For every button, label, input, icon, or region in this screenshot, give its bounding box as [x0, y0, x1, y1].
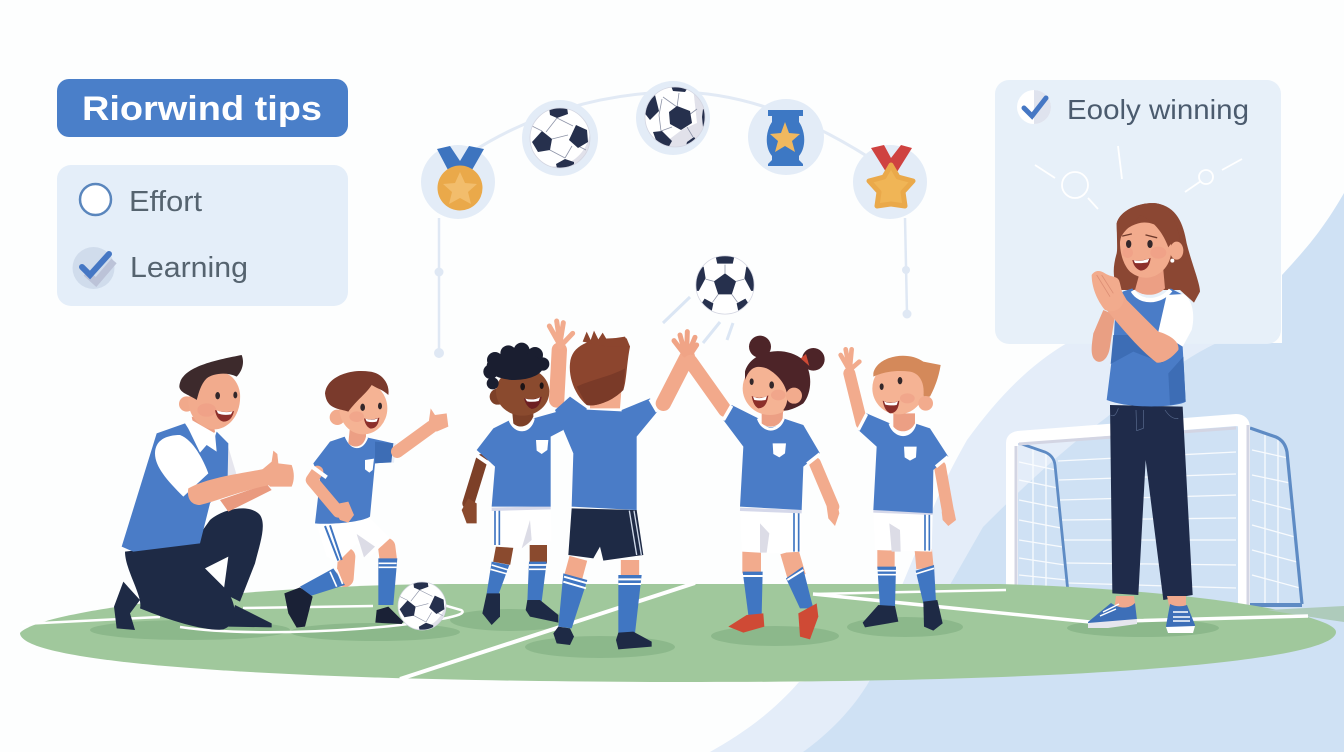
pitch lines — [22, 583, 1308, 679]
icon: check — [1017, 90, 1051, 124]
woman coach clapping — [1092, 203, 1200, 600]
right connector — [902, 218, 912, 318]
arc line — [472, 92, 870, 158]
boy from behind giving a high five — [549, 321, 697, 649]
label: Eooly winning: Eooly winning — [1067, 94, 1249, 125]
boy kicking a ball — [284, 371, 448, 628]
panel: Riorwind tips — [57, 79, 348, 306]
heading: Riorwind tips: Riorwind tips — [82, 90, 322, 128]
collar — [1133, 290, 1171, 300]
pants — [1110, 405, 1193, 600]
football pitch — [20, 583, 1344, 682]
woman's shoes — [1088, 596, 1195, 633]
face — [1120, 223, 1171, 278]
background swoosh: light blue — [710, 343, 1344, 752]
player shadows — [90, 609, 1219, 658]
coach kneeling with thumbs up — [114, 355, 294, 630]
icon: football — [636, 81, 710, 155]
ball: in flight with motion lines — [663, 255, 758, 343]
goal — [1012, 420, 1302, 608]
goal posts — [1012, 420, 1244, 608]
item: Effort — [80, 184, 202, 218]
icon: blue trophy with star — [748, 99, 824, 175]
goal net — [1019, 433, 1300, 604]
background swoosh: darker blue — [803, 193, 1344, 752]
item: Learning: Learning — [130, 252, 248, 284]
white sleeves — [1158, 294, 1193, 347]
panel: Eooly winning — [995, 80, 1281, 344]
arc of achievement icons — [421, 81, 927, 358]
arms and hands — [1092, 310, 1115, 362]
hair fringe — [1117, 203, 1181, 255]
girl with hair buns — [691, 336, 839, 639]
neck — [1135, 270, 1165, 295]
decoration: whistle sketches — [1035, 146, 1242, 209]
panel: checklist — [57, 165, 348, 306]
goal side frames — [1019, 443, 1068, 592]
item: Learning — [72, 247, 248, 289]
boy with orange hair waving — [841, 349, 956, 631]
band at pitch edge — [1267, 606, 1344, 622]
ball: at boy's foot — [398, 581, 446, 635]
vest — [1107, 288, 1186, 406]
item: Effort: Effort — [129, 186, 202, 218]
heading: Riorwind tips — [57, 79, 348, 137]
icon: football — [522, 100, 598, 176]
hair back — [1114, 203, 1200, 303]
icon: star medal with red ribbon — [853, 145, 927, 219]
arm across belly — [312, 472, 338, 512]
left connector — [434, 218, 444, 358]
icon: gold medal — [421, 145, 495, 219]
dark-skinned boy — [462, 343, 563, 625]
